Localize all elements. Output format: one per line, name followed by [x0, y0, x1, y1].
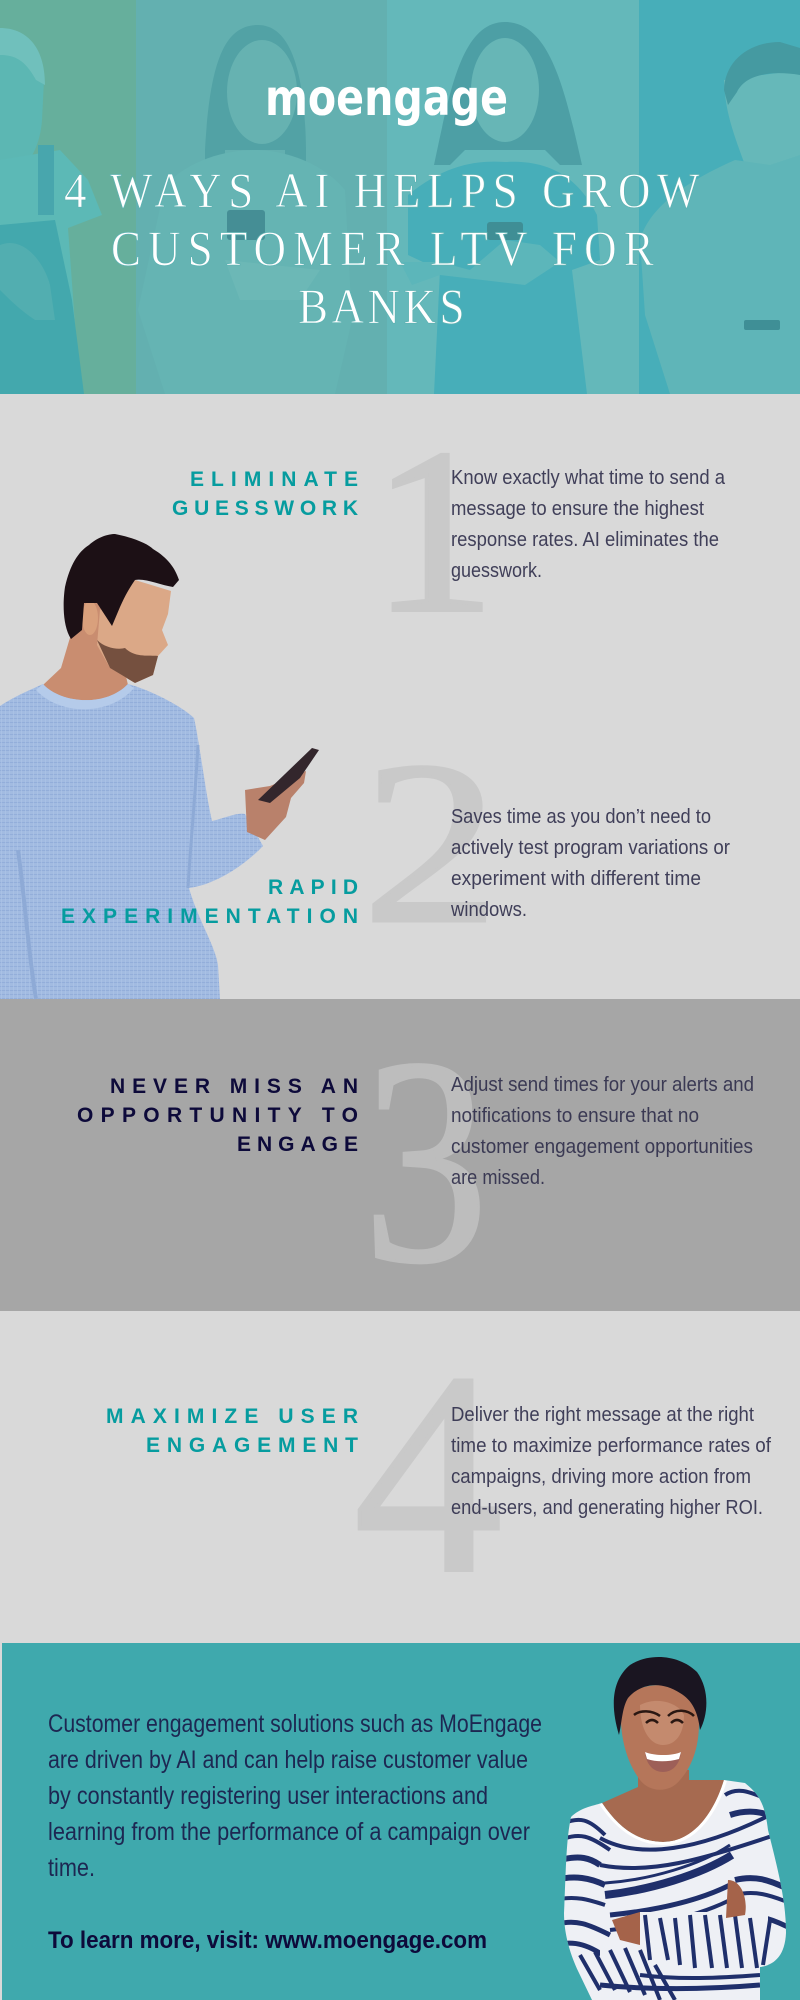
heading: eliminate guesswork — [172, 468, 358, 520]
text: closing paragraph: Customer engagement solutions such as MoEngage — [48, 1710, 542, 1738]
photo: man with phone — [0, 534, 319, 999]
text: step 1 — [451, 467, 726, 582]
text: step 3: are missed. — [451, 1167, 545, 1189]
man neck — [43, 600, 128, 702]
man hair — [64, 534, 179, 639]
heading: never miss an opportunity: OPPORTUNITY TO — [77, 1104, 358, 1127]
text: closing paragraph: time. — [48, 1854, 95, 1882]
panel: header photo band — [0, 0, 800, 394]
photo: smiling woman in striped top — [555, 1657, 795, 2000]
panel: teal closing section background — [2, 1643, 800, 2000]
text: step 4: Deliver the right message at the right — [451, 1404, 754, 1426]
text: step 1: Know exactly what time to send a — [451, 467, 726, 489]
icon: ghosted person 3 — [400, 22, 600, 394]
title: CUSTOMER LTV FOR — [111, 222, 654, 277]
panel: light section 4 background — [0, 1311, 800, 1643]
heading: eliminate guesswork: GUESSWORK — [172, 497, 358, 520]
text: step 4: campaigns, driving more action from — [451, 1466, 751, 1488]
woman eyes and mouth — [634, 1711, 694, 1716]
heading: rapid experimentation: EXPERIMENTATION — [61, 905, 358, 928]
woman hand — [612, 1880, 746, 1945]
text: step 3: notifications to ensure that no — [451, 1105, 699, 1127]
text: call to action: To learn more, visit: www.moengage.com — [48, 1927, 487, 1954]
man hand — [245, 771, 306, 840]
panel: dark section 3 background — [0, 999, 800, 1311]
text: closing paragraph — [48, 1710, 542, 1882]
woman hair — [614, 1657, 706, 1735]
text: step 3 — [451, 1074, 754, 1189]
number 2: 2 — [362, 714, 499, 972]
text: step 3: Adjust send times for your alerts and — [451, 1074, 754, 1096]
number 1: 1 — [372, 401, 495, 662]
man sweater — [0, 684, 263, 999]
heading: never miss an opportunity: ENGAGE — [237, 1133, 358, 1156]
text: step 2: Saves time as you don’t need to — [451, 806, 711, 828]
text: closing paragraph: by constantly registering user interactions and — [48, 1782, 488, 1810]
man phone — [258, 748, 319, 803]
text: closing paragraph: are driven by AI and can help raise customer value — [48, 1746, 528, 1774]
text: step 4: time to maximize performance rates of — [451, 1435, 771, 1457]
heading: eliminate guesswork: ELIMINATE — [190, 468, 358, 491]
text: step 1: message to ensure the highest — [451, 498, 704, 520]
icon: ghosted person 2 — [205, 25, 320, 300]
text: step 2 — [450, 806, 730, 921]
title: BANKS — [298, 280, 465, 335]
number 4: 4 — [354, 1314, 502, 1633]
text: step 3: customer engagement opportunities — [451, 1136, 753, 1158]
text: closing paragraph: learning from the performance of a campaign over — [48, 1818, 530, 1846]
icon: ghosted person 1 — [0, 28, 102, 394]
woman face — [621, 1685, 699, 1790]
man face — [97, 580, 171, 683]
logo: moengage: moengage — [265, 69, 508, 127]
panel: light sections 1 and 2 background — [0, 394, 800, 999]
text: step 4: end-users, and generating higher ROI. — [451, 1497, 763, 1519]
number 3: 3 — [363, 998, 488, 1325]
text: step 2: experiment with different time — [451, 868, 701, 890]
heading: never miss an opportunity — [77, 1075, 358, 1156]
heading: never miss an opportunity: NEVER MISS AN — [110, 1075, 358, 1098]
woman neck and chest — [602, 1770, 724, 1842]
text: step 1: guesswork. — [451, 560, 542, 582]
text: step 2: windows. — [450, 899, 527, 921]
icon: ghosted person 4 — [640, 42, 800, 394]
heading: rapid experimentation — [61, 876, 358, 928]
woman striped shirt — [555, 1775, 795, 2000]
heading: maximize user engagement: MAXIMIZE USER — [106, 1405, 358, 1428]
title — [64, 164, 700, 335]
text: step 1: response rates. AI eliminates the — [451, 529, 719, 551]
heading: rapid experimentation: RAPID — [268, 876, 358, 899]
heading: maximize user engagement — [106, 1405, 358, 1457]
title: 4 WAYS AI HELPS GROW — [64, 164, 700, 219]
heading: maximize user engagement: ENGAGEMENT — [146, 1434, 358, 1457]
text: step 4 — [451, 1404, 771, 1519]
text: step 2: actively test program variations or — [451, 837, 730, 859]
